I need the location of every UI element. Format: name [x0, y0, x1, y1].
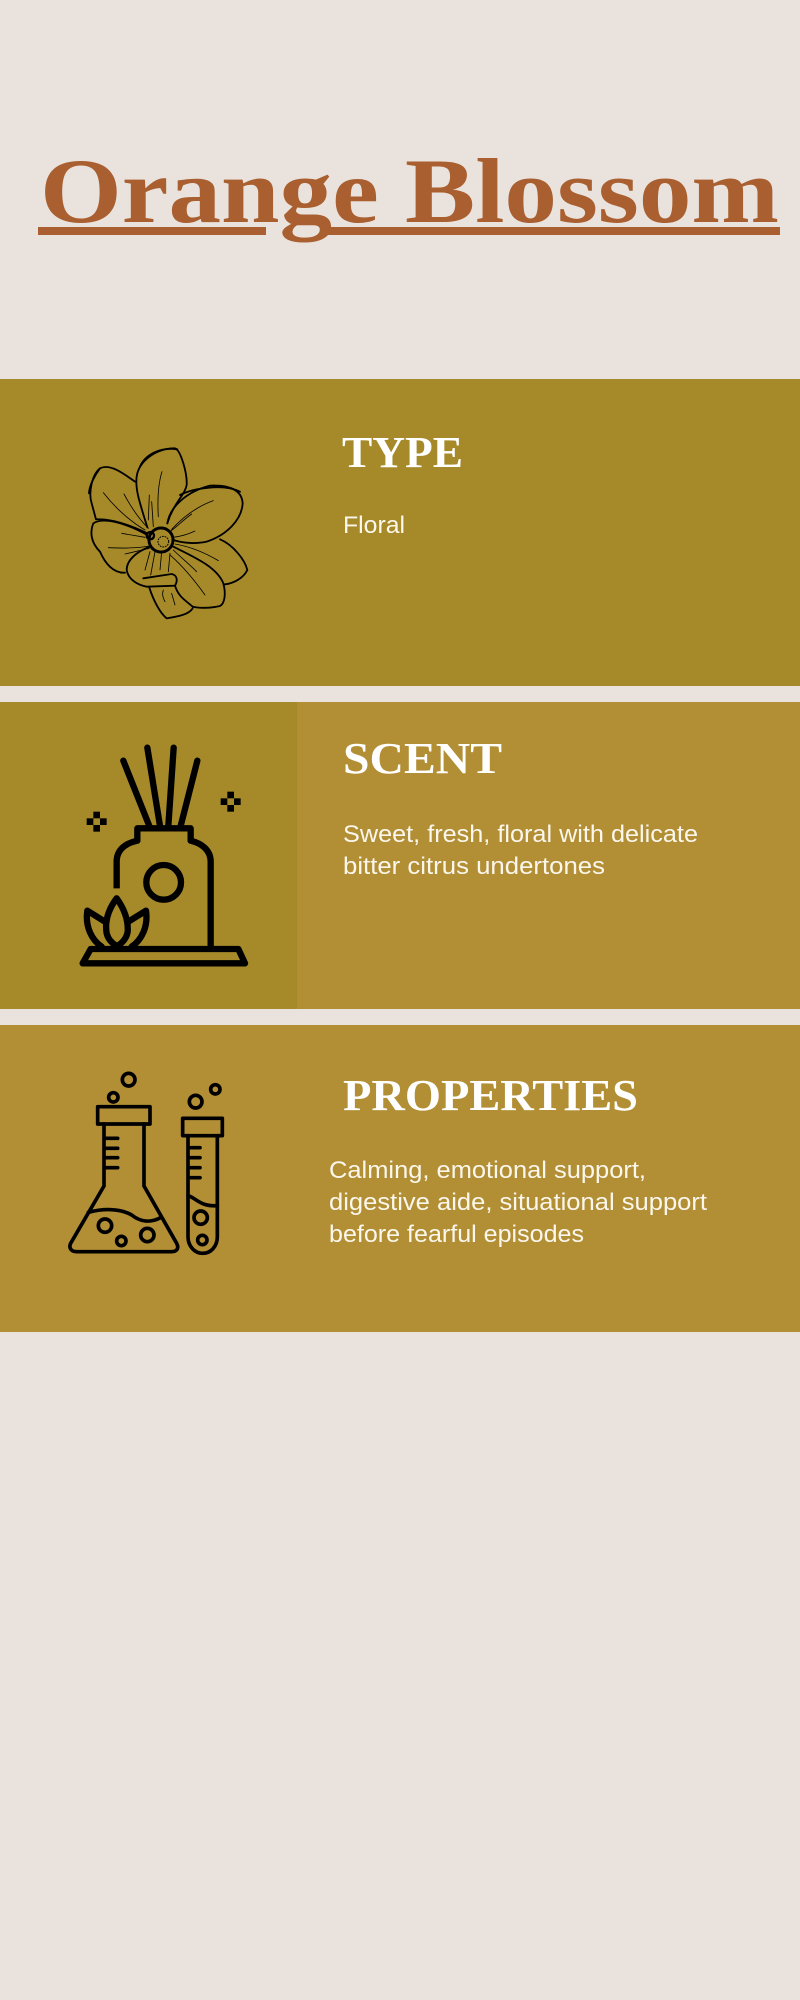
- text: scent description: bitter citrus undertones: [343, 853, 605, 880]
- text: scent description: [343, 821, 698, 880]
- heading: properties: PROPERTIES: [343, 1071, 638, 1120]
- text: properties description: [329, 1157, 707, 1248]
- icon: flower: [89, 448, 247, 618]
- panel: properties: [0, 1025, 800, 1332]
- text: properties description: Calming, emotional support,: [329, 1157, 646, 1184]
- text: properties description: before fearful episodes: [329, 1221, 584, 1248]
- text: properties description: digestive aide, situational support: [329, 1189, 707, 1216]
- panel: type: [0, 379, 800, 686]
- heading: scent: SCENT: [343, 734, 502, 783]
- icon: laboratory flask and test tube: [70, 1073, 222, 1253]
- icon: reed diffuser: [83, 748, 245, 963]
- text: type description: Floral: [343, 512, 405, 539]
- panel: scent: [0, 702, 800, 1009]
- heading: type: TYPE: [342, 428, 463, 477]
- title: Orange Blossom: [40, 140, 779, 242]
- text: scent description: Sweet, fresh, floral with delicate: [343, 821, 698, 848]
